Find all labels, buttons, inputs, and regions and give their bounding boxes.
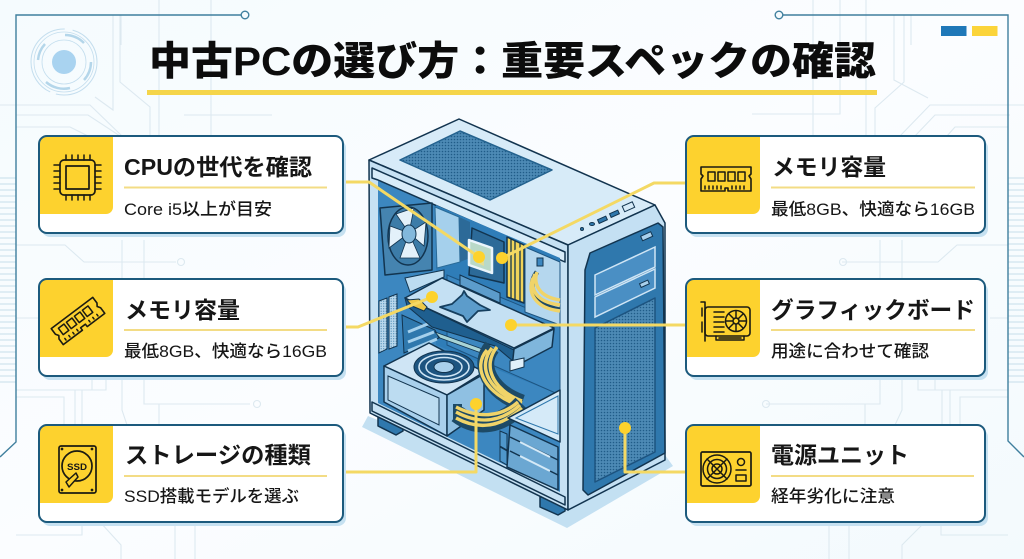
connector: memory right (496, 183, 686, 264)
heading: memory right: メモリ容量 (772, 154, 886, 180)
decorative target icon (31, 29, 97, 95)
heading: graphics board: グラフィックボード (771, 297, 975, 323)
coiled cable (531, 272, 560, 311)
panel: memory right (686, 136, 988, 237)
text: graphics board: 用途に合わせて確認 (771, 342, 929, 361)
rear wall (436, 205, 560, 395)
panel: power supply (686, 425, 988, 526)
front mesh (595, 298, 655, 482)
heading: power supply: 電源ユニット (771, 442, 909, 468)
pci slots (379, 294, 397, 353)
motherboard right side (525, 247, 560, 325)
psu (384, 343, 484, 436)
text: storage: SSD搭載モデルを選ぶ (124, 486, 299, 506)
power cables (456, 347, 522, 425)
left edge stripes (0, 178, 16, 382)
title: 中古PCの選び方：重要スペックの確認 (149, 40, 877, 84)
text: cpu: Core i5以上が目安 (124, 199, 272, 219)
cpu cooler (469, 228, 504, 283)
icon: memory module diagonal (51, 297, 105, 345)
icon: ssd (59, 446, 96, 493)
panel: graphics board (686, 279, 988, 380)
heading: storage: ストレージの種類 (125, 442, 311, 468)
top panel (369, 119, 655, 245)
expansion slots (402, 315, 439, 353)
drive bay covers (595, 247, 655, 317)
text: power supply: 経年劣化に注意 (771, 487, 895, 506)
connector: memory left (343, 291, 438, 327)
board slot (405, 270, 444, 292)
icon: graphics card (701, 302, 750, 341)
icon: power unit (701, 452, 751, 486)
ram sticks (507, 237, 524, 303)
heading: cpu: CPUの世代を確認 (124, 154, 312, 180)
text: memory left: 最低8GB、快適なら16GB (124, 342, 327, 361)
glass panel (435, 207, 460, 268)
floor shadow (362, 416, 673, 528)
icon: memory module (701, 167, 751, 191)
icon label: ssd: SSD (67, 462, 88, 472)
icon: cpu chip (54, 155, 101, 200)
front ports (580, 202, 635, 230)
graphics board (405, 278, 554, 371)
panel: storage (39, 425, 346, 526)
side opening interior (369, 160, 568, 510)
top mesh (400, 131, 552, 200)
top right colour swatches (941, 26, 998, 36)
front buttons (640, 232, 653, 287)
frame line left (0, 11, 249, 457)
connector: graphics board (505, 319, 686, 331)
panel: cpu (39, 136, 346, 237)
title underline (147, 90, 877, 95)
connector: storage (343, 398, 482, 472)
heading: memory left: メモリ容量 (125, 297, 240, 323)
drive bays (500, 390, 560, 490)
front panel (568, 205, 665, 510)
connector: cpu (343, 182, 485, 263)
connector: power supply (619, 422, 686, 472)
right edge stripes (1008, 178, 1024, 382)
text: memory right: 最低8GB、快適なら16GB (771, 200, 975, 219)
panel: memory left (39, 279, 346, 380)
rear fan (380, 203, 432, 275)
frame line right (775, 11, 1024, 457)
feet (378, 413, 565, 515)
pc tower illustration (362, 119, 673, 528)
